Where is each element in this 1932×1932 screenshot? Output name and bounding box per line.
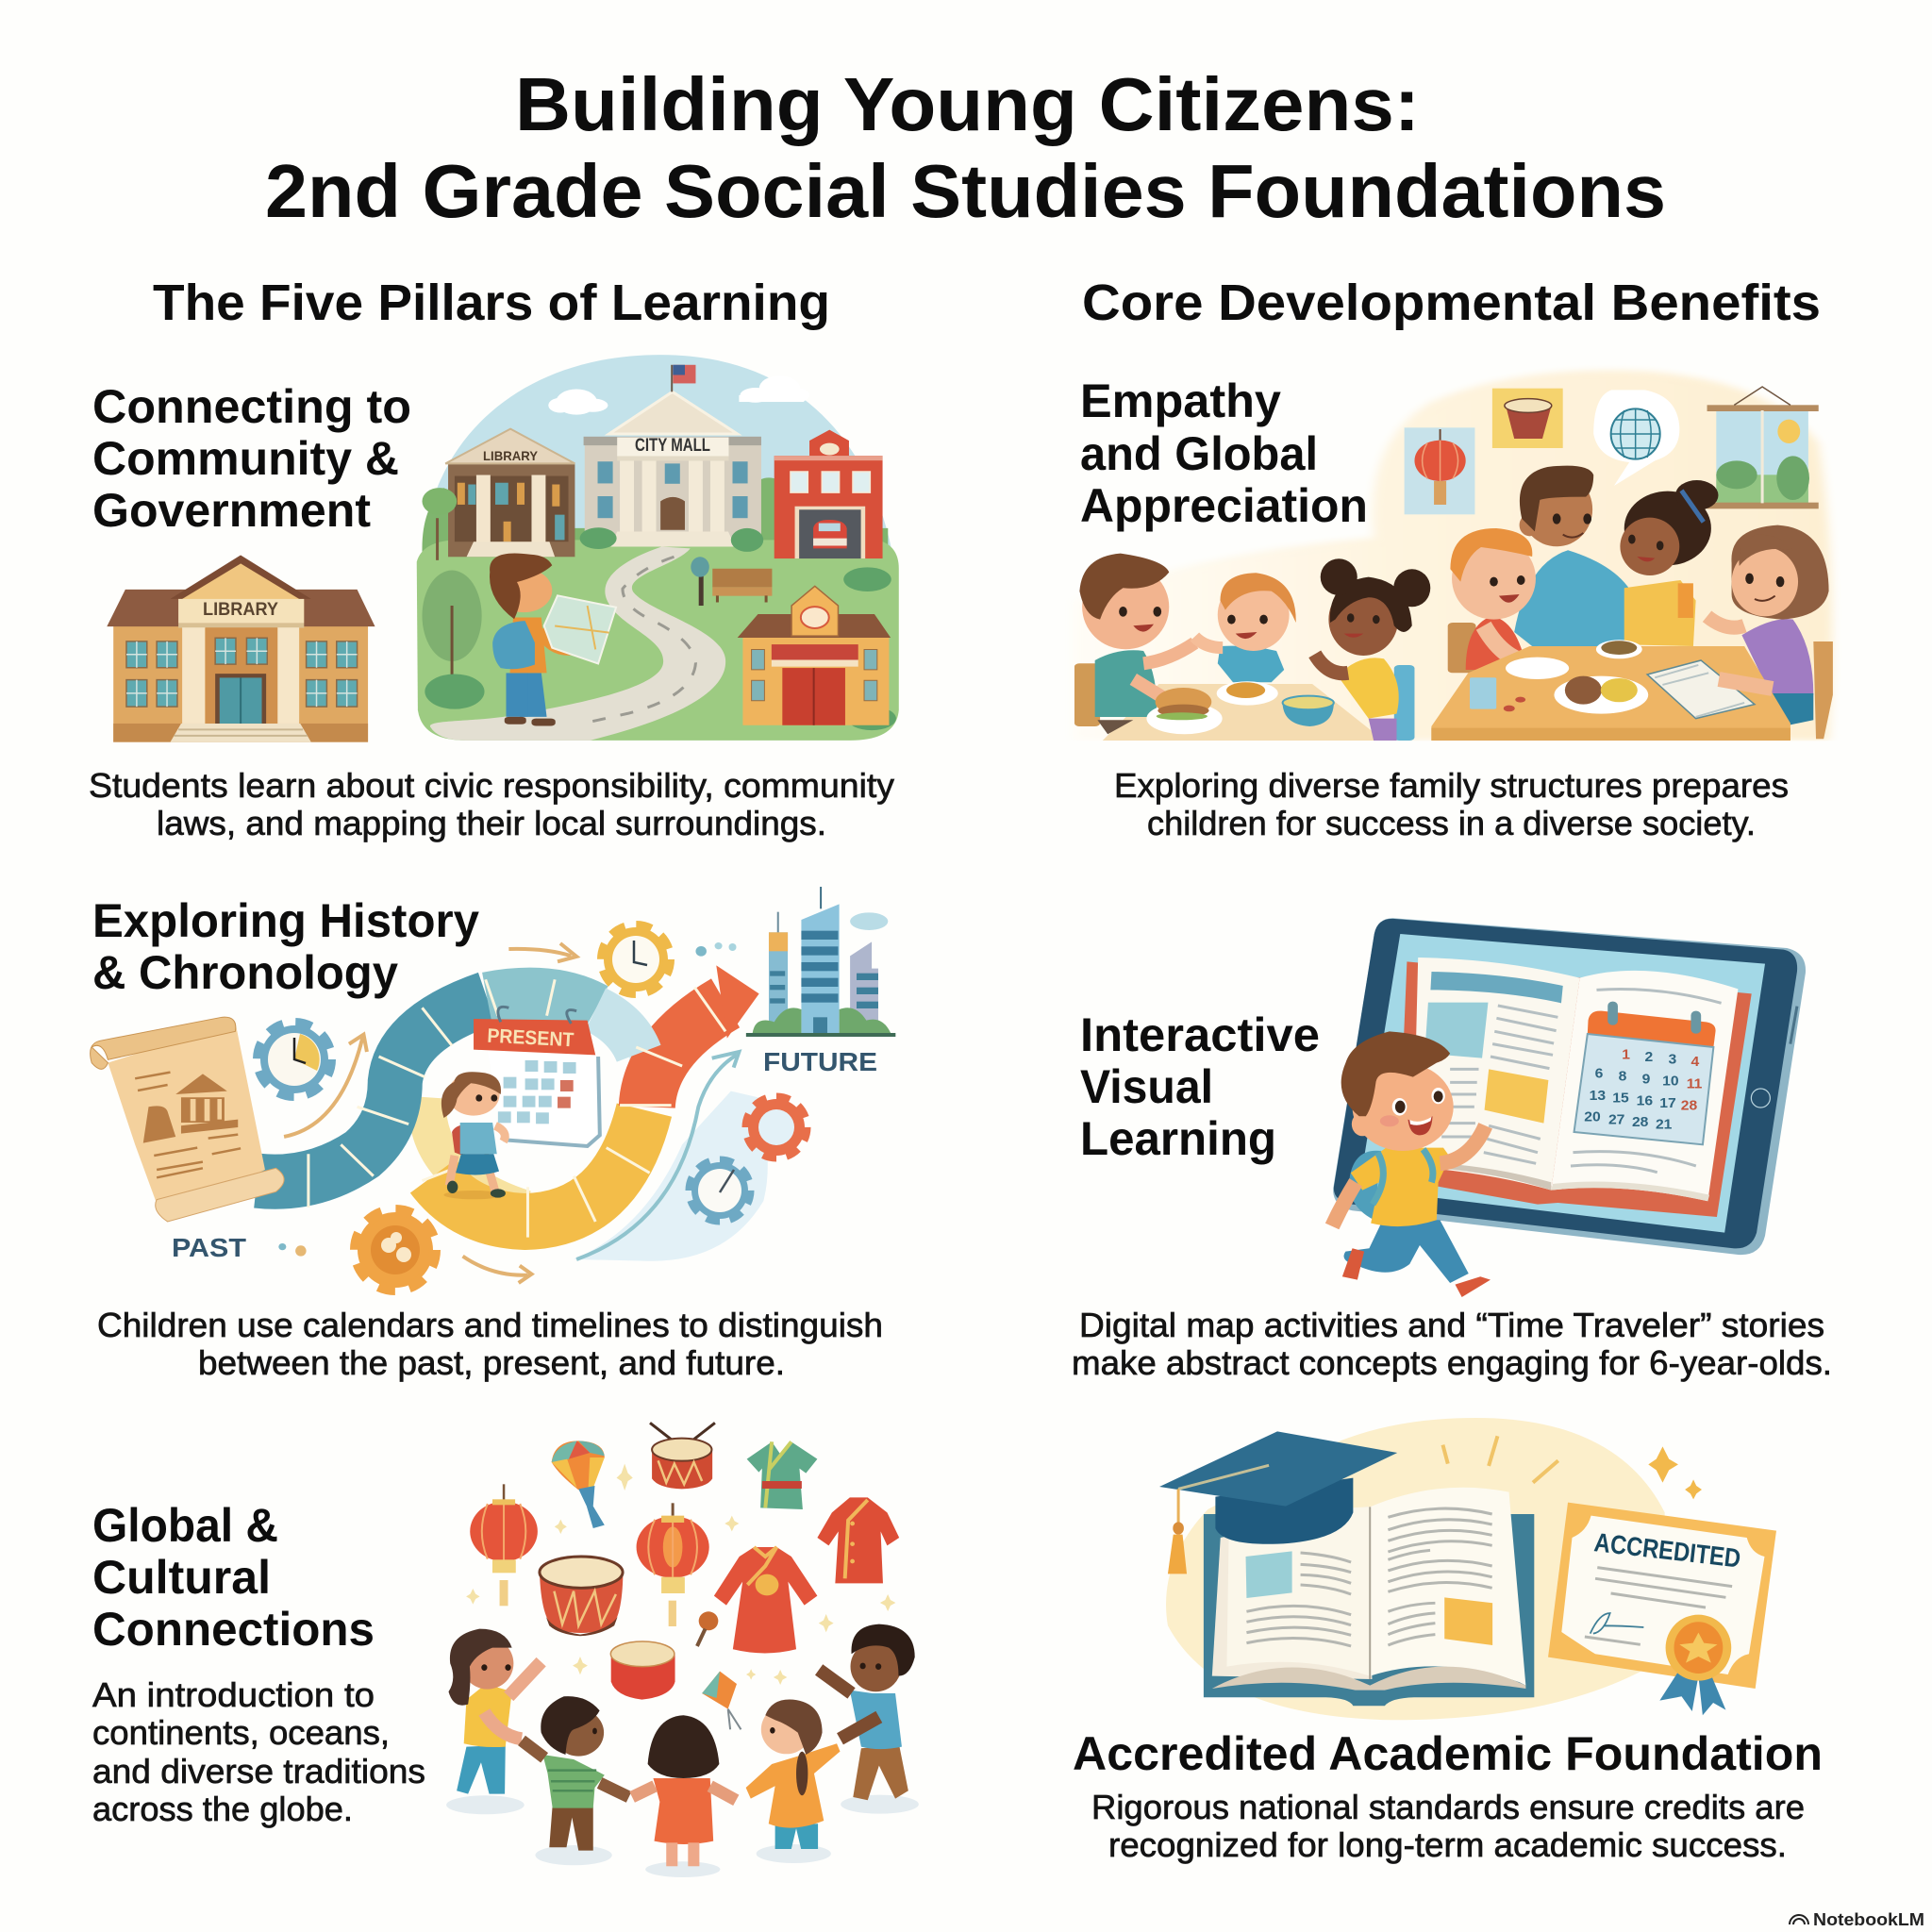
- small kite: [702, 1672, 737, 1709]
- kite top: [552, 1441, 605, 1490]
- buildings: [850, 912, 888, 930]
- subheading: global: [92, 1499, 375, 1656]
- subheading: connecting to community: [92, 380, 411, 537]
- illustration: tablet with book and child: 20: [1584, 1109, 1601, 1125]
- caption: global: continents, oceans,: [92, 1713, 390, 1752]
- subheading: connecting to community: Connecting to: [92, 380, 411, 433]
- subheading: global: Global &: [92, 1499, 278, 1552]
- panel: history and chronology: [91, 887, 895, 1382]
- red shirt boy: [1448, 623, 1476, 673]
- title: [265, 62, 1666, 233]
- small fire station: [742, 638, 889, 725]
- illustration: tablet with book and child: 15: [1612, 1091, 1629, 1107]
- boy: [520, 673, 547, 717]
- lantern left: [503, 1484, 505, 1500]
- label: library sign: LIBRARY: [203, 600, 278, 620]
- subheading: interactive: [1080, 1008, 1320, 1165]
- child center back: [653, 1778, 713, 1844]
- caption: global: across the globe.: [92, 1790, 353, 1828]
- illustration: tablet with book and child: 28: [1681, 1098, 1697, 1114]
- caption: empathy: Exploring diverse family structures prepares: [1114, 766, 1789, 805]
- fire station top right: [809, 430, 849, 456]
- illustration: tablet with book and child: 11: [1687, 1076, 1703, 1091]
- wall pictures: [1405, 427, 1474, 514]
- caption: global: [92, 1675, 425, 1828]
- subheading: connecting to community: Community &: [92, 432, 399, 485]
- subheading: empathy: [1080, 375, 1368, 532]
- subheading: interactive: Interactive: [1080, 1008, 1320, 1061]
- illustration: tablet with book and child: 8: [1619, 1069, 1626, 1084]
- illustration: tablet with book and child: 17: [1659, 1095, 1676, 1111]
- illustration: children sharing a meal: [1057, 370, 1858, 759]
- gears and clocks: [258, 926, 806, 1290]
- illustration: tablet with book and child: 21: [1656, 1117, 1673, 1133]
- illustration: town scene with boy and map: [417, 355, 899, 741]
- girl with puffs: [1394, 665, 1414, 741]
- calendar: [487, 1049, 598, 1141]
- panel: accredited academic foundation: [1073, 1418, 1823, 1864]
- ribbons: [427, 1097, 525, 1209]
- shadows: [446, 1795, 919, 1877]
- lamp and bench: [699, 572, 704, 606]
- panel: community and government: [89, 355, 899, 842]
- subheading: empathy: Empathy: [1080, 375, 1281, 427]
- arrows and dots: [284, 1038, 362, 1137]
- subheading: global: Cultural: [92, 1551, 271, 1604]
- subheading: accredited: Accredited Academic Foundation: [1073, 1727, 1823, 1780]
- illustration: tablet with book and child: 13: [1590, 1088, 1606, 1104]
- illustration: library building: [107, 555, 375, 742]
- illustration: tablet with book and child: 1: [1622, 1047, 1631, 1063]
- label: city hall sign: CITY MALL: [635, 436, 710, 456]
- caption: history: between the past, present, and future.: [198, 1343, 785, 1382]
- subheading: history: Exploring History: [92, 894, 479, 947]
- caption: accredited: recognized for long-term academic success.: [1108, 1825, 1787, 1864]
- title: Building Young Citizens:: [515, 62, 1420, 146]
- graduation cap: [1215, 1478, 1353, 1544]
- caption: interactive: Digital map activities and “Time Traveler” stories: [1079, 1306, 1824, 1344]
- subheading: connecting to community: Government: [92, 484, 371, 537]
- title: 2nd Grade Social Studies Foundations: [265, 149, 1666, 233]
- illustration: tablet with book and child: 3: [1669, 1052, 1676, 1067]
- green shirt: [747, 1441, 817, 1509]
- label: past: PAST: [172, 1233, 246, 1262]
- small drum: [611, 1654, 675, 1700]
- illustration: book, cap and certificate: [1159, 1418, 1776, 1720]
- caption: empathy: [1114, 766, 1789, 842]
- road: [430, 547, 725, 741]
- illustration: tablet with book and child: 6: [1595, 1066, 1603, 1082]
- caption: global: An introduction to: [92, 1675, 375, 1714]
- label: back library sign: LIBRARY: [483, 448, 539, 463]
- girl: [443, 1191, 504, 1199]
- subheading: interactive: Learning: [1080, 1112, 1276, 1165]
- city hall: [585, 438, 761, 539]
- teacher: [1514, 550, 1637, 646]
- big table: [1431, 646, 1790, 741]
- maraca: [699, 1611, 718, 1630]
- caption: empathy: children for success in a diverse society.: [1147, 804, 1756, 842]
- label: future: FUTURE: [763, 1047, 877, 1076]
- caption: history: [97, 1306, 883, 1382]
- caption: community: laws, and mapping their local surroundings.: [157, 804, 826, 842]
- caption: history: Children use calendars and timelines to distinguish: [97, 1306, 883, 1344]
- caption: interactive: make abstract concepts engaging for 6-year-olds.: [1072, 1343, 1832, 1382]
- caption: accredited: [1091, 1788, 1805, 1864]
- purple woman: [1813, 641, 1833, 739]
- illustration: timeline road: [91, 887, 895, 1290]
- illustration: tablet with book and child: [1332, 918, 1806, 1297]
- trees: [436, 518, 439, 560]
- boy one: [1074, 663, 1100, 726]
- subheading: history: & Chronology: [92, 946, 398, 999]
- illustration: tablet with book and child: 28: [1632, 1114, 1648, 1130]
- illustration: tablet with book and child: 27: [1608, 1112, 1624, 1127]
- back library: [448, 464, 575, 557]
- illustration: tablet with book and child: 16: [1637, 1093, 1653, 1108]
- sparkles: [466, 1464, 895, 1685]
- subheading: empathy: and Global: [1080, 427, 1318, 480]
- child right: [853, 1745, 908, 1800]
- label: accredited: ACCREDITED: [1592, 1527, 1742, 1574]
- subheading: interactive: Visual: [1080, 1060, 1213, 1113]
- illustration: tablet with book and child: 10: [1662, 1074, 1679, 1090]
- illustration: children around cultural objects: [446, 1423, 919, 1877]
- red robes: [714, 1547, 817, 1653]
- boy two: [1218, 646, 1284, 682]
- caption: community: Students learn about civic responsibility, community: [89, 766, 894, 805]
- subheading: global: Connections: [92, 1603, 375, 1656]
- child left yellow: [457, 1745, 506, 1794]
- watermark: NotebookLM: NotebookLM: [1813, 1910, 1924, 1929]
- illustration: tablet with book and child: 9: [1642, 1072, 1650, 1088]
- caption: accredited: Rigorous national standards ensure credits are: [1091, 1788, 1805, 1826]
- rays and stars: [1442, 1436, 1558, 1483]
- panel: global and cultural connections: [92, 1423, 919, 1877]
- caption: global: and diverse traditions: [92, 1752, 425, 1790]
- boy: [1344, 1220, 1469, 1283]
- subheading: history: [92, 894, 479, 999]
- child back green: [549, 1805, 593, 1851]
- child braid: [775, 1824, 818, 1849]
- heading: five pillars: The Five Pillars of Learning: [153, 275, 830, 331]
- illustration: tablet with book and child: 4: [1690, 1054, 1700, 1070]
- certificate: [1548, 1503, 1776, 1689]
- caption: community: [89, 766, 894, 842]
- caption: interactive: [1072, 1306, 1832, 1382]
- panel: empathy and global appreciation: [1057, 370, 1858, 842]
- panel: interactive visual learning: [1072, 918, 1832, 1382]
- scroll: [108, 1022, 265, 1219]
- left table: [1103, 684, 1384, 741]
- illustration: tablet with book and child: 2: [1645, 1049, 1653, 1065]
- central lantern: [672, 1503, 675, 1516]
- subheading: empathy: Appreciation: [1080, 479, 1368, 532]
- drum top: [650, 1423, 715, 1445]
- label: present: PRESENT: [487, 1025, 575, 1051]
- big drum: [540, 1573, 623, 1633]
- girl with bun: [1624, 580, 1696, 646]
- heading: core benefits: Core Developmental Benefits: [1082, 275, 1821, 331]
